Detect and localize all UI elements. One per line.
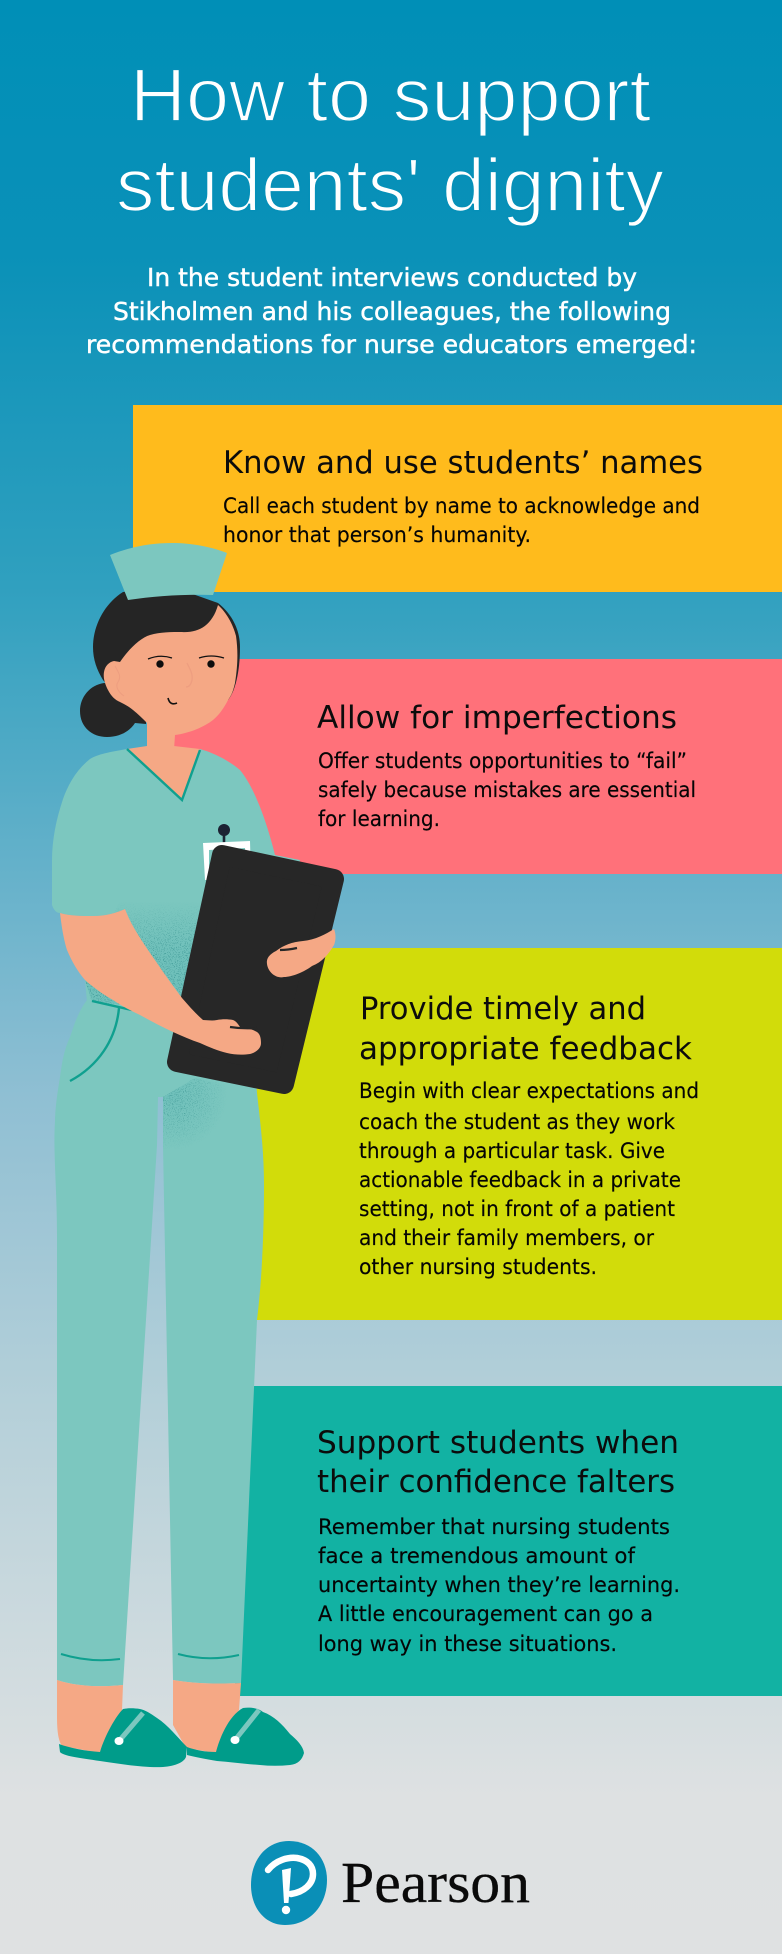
body: know names: Call each student by name to acknowledge and xyxy=(223,494,700,519)
clipboard xyxy=(177,855,334,1084)
body: feedback: other nursing students. xyxy=(359,1255,597,1280)
body: know names: honor that person’s humanity. xyxy=(223,523,531,548)
logo: Pearson xyxy=(251,1841,530,1925)
panel: know and use students' names xyxy=(133,405,782,592)
slipper straps xyxy=(119,1710,259,1741)
body: confidence: Remember that nursing students xyxy=(318,1515,670,1540)
right foot xyxy=(173,1680,241,1753)
face xyxy=(104,605,237,750)
heading: imperfections: Allow for imperfections xyxy=(317,700,677,736)
body: feedback xyxy=(359,1079,699,1280)
wordmark: Pearson xyxy=(341,1850,530,1915)
body: feedback: actionable feedback in a private xyxy=(359,1168,681,1193)
right slipper xyxy=(187,1708,304,1766)
body: imperfections: for learning. xyxy=(318,807,440,832)
nurse cap xyxy=(110,543,227,600)
hair bun xyxy=(80,683,146,737)
heading: confidence xyxy=(317,1425,679,1500)
panel: allow for imperfections xyxy=(174,659,782,874)
body: feedback: setting, not in front of a patient xyxy=(359,1197,675,1222)
badge pin xyxy=(218,824,230,844)
finger lines xyxy=(230,948,297,1028)
panel: timely feedback xyxy=(240,948,782,1320)
body: imperfections: Offer students opportunities to “fail” xyxy=(318,749,687,774)
nose xyxy=(186,663,192,687)
panel: support confidence xyxy=(235,1386,782,1696)
heading: confidence: Support students when xyxy=(317,1425,679,1461)
intro text xyxy=(86,263,697,359)
title: students' dignity xyxy=(116,143,665,227)
heading: know names: Know and use students’ names xyxy=(223,445,703,481)
heading: feedback: appropriate feedback xyxy=(359,1031,692,1067)
scrub top xyxy=(52,749,300,1030)
body: confidence xyxy=(318,1515,680,1657)
ear detail xyxy=(115,666,124,696)
smile xyxy=(168,698,177,704)
body: confidence: face a tremendous amount of xyxy=(318,1544,635,1569)
left foot xyxy=(57,1680,123,1753)
scrub pants xyxy=(54,1000,264,1686)
heading: feedback xyxy=(359,991,692,1067)
logo dot xyxy=(282,1906,290,1914)
hair xyxy=(93,586,240,700)
skin v-neck xyxy=(127,746,200,800)
title xyxy=(116,53,665,227)
body: know names xyxy=(223,494,700,548)
body: confidence: uncertainty when they’re learning. xyxy=(318,1573,680,1598)
logo P glyph xyxy=(268,1858,313,1894)
intro text: Stikholmen and his colleagues, the following xyxy=(113,297,671,326)
eyes and brows xyxy=(148,656,224,668)
far hand xyxy=(267,929,336,977)
left slipper xyxy=(59,1708,187,1767)
body: feedback: Begin with clear expectations and xyxy=(359,1079,699,1104)
torso shading xyxy=(85,900,205,1012)
heading: feedback: Provide timely and xyxy=(360,991,646,1027)
leg shading xyxy=(163,1078,228,1152)
nurse illustration xyxy=(52,543,336,1767)
intro text: recommendations for nurse educators emerged: xyxy=(86,330,697,359)
body: feedback: through a particular task. Give xyxy=(359,1139,665,1164)
body: feedback: and their family members, or xyxy=(359,1226,654,1251)
cuff lines xyxy=(61,1654,239,1660)
body: imperfections xyxy=(318,749,696,832)
heading: confidence: their confidence falters xyxy=(317,1464,675,1500)
waist and pocket trim xyxy=(70,1001,132,1081)
body: feedback: coach the student as they work xyxy=(359,1110,676,1135)
slipper studs xyxy=(114,1736,240,1745)
v-neck trim xyxy=(127,749,200,800)
near arm xyxy=(60,909,261,1055)
body: confidence: long way in these situations. xyxy=(318,1632,617,1657)
body: confidence: A little encouragement can go a xyxy=(318,1602,653,1627)
logo stem xyxy=(282,1868,291,1903)
intro text: In the student interviews conducted by xyxy=(147,263,637,292)
title: How to support xyxy=(130,53,651,137)
id badge xyxy=(203,841,251,880)
body: imperfections: safely because mistakes are essential xyxy=(318,778,696,803)
logo mark xyxy=(251,1841,327,1925)
